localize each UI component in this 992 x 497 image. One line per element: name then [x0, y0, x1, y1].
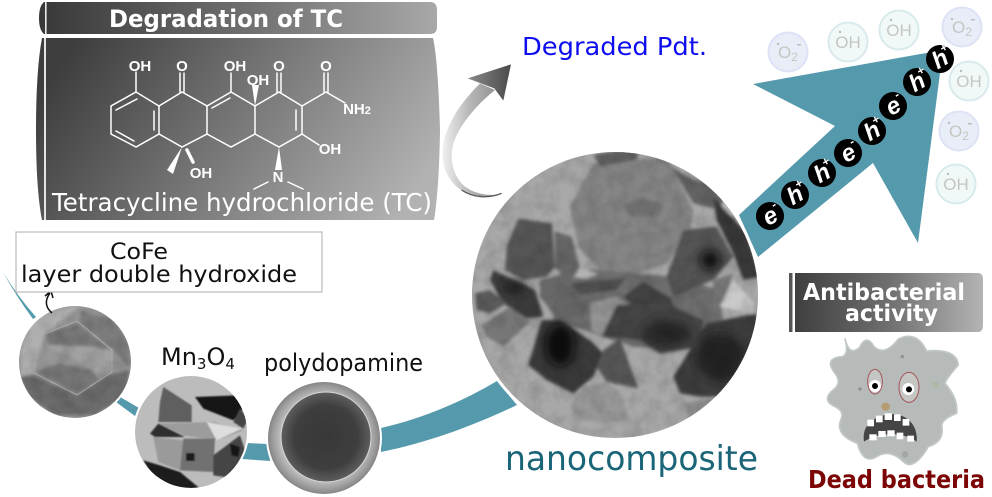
molecule atom labels: O — [273, 58, 285, 75]
label box: CoFe layer double hydroxide — [16, 232, 322, 292]
caption: tetracycline hydrochloride: Tetracycline hydrochloride (TC) — [51, 188, 432, 217]
circle: nanocomposite TEM image — [469, 147, 761, 441]
radical bubbles: O — [949, 122, 962, 141]
arrow: charge carriers — [739, 50, 943, 257]
charge carrier beads: + — [937, 40, 950, 55]
label: degraded product: Degraded Pdt. — [522, 32, 707, 61]
label: Mn3O4: 3 — [197, 355, 206, 373]
radical bubbles: OH — [956, 72, 982, 91]
header: antibacterial activity — [789, 273, 983, 332]
label: polydopamine: polydopamine — [264, 349, 423, 377]
label: Mn3O4: 4 — [225, 355, 235, 373]
charge carrier beads: + — [869, 112, 882, 127]
molecule atom labels: OH — [190, 165, 212, 182]
charge carrier beads: - — [847, 135, 857, 149]
label: nanocomposite: nanocomposite — [505, 439, 758, 479]
radical bubbles: OH — [835, 33, 861, 52]
charge carrier beads: h — [927, 44, 953, 75]
charge carrier beads: h — [782, 180, 808, 211]
radical bubbles: OH — [886, 21, 912, 40]
label box: CoFe layer double hydroxide: layer double hydroxide — [21, 262, 297, 288]
panel: degradation of TC — [36, 2, 440, 220]
curved arrow: to degraded product — [442, 64, 511, 197]
charge carrier beads: - — [892, 88, 902, 102]
radical bubbles: 2 — [791, 50, 798, 64]
circle: Mn3O4 TEM image — [133, 374, 249, 490]
molecule atom labels: N — [273, 169, 283, 186]
teal growth curve — [3, 272, 517, 461]
header: antibacterial activity: activity — [845, 301, 938, 327]
radical bubbles: OH — [943, 175, 969, 194]
header: antibacterial activity: Antibacterial — [803, 280, 965, 306]
circle: CoFe LDH TEM image — [17, 304, 133, 420]
radical bubbles: 2 — [965, 25, 972, 39]
charge carrier beads: - — [769, 198, 779, 212]
molecule atom labels — [129, 58, 371, 186]
circle: polydopamine TEM image — [266, 380, 382, 496]
header bar: degradation of TC — [39, 2, 437, 34]
molecule atom labels: O — [176, 58, 188, 75]
radical bubbles: O — [952, 18, 965, 37]
radical bubbles — [768, 8, 988, 204]
label: Mn3O4: O — [206, 343, 225, 371]
molecule atom labels: OH — [247, 72, 269, 89]
molecule: tetracycline structure — [111, 72, 345, 189]
wedge bonds — [167, 85, 282, 174]
molecule atom labels: O — [320, 58, 332, 75]
molecule atom labels: OH — [224, 58, 246, 75]
charge carrier beads: h — [904, 67, 930, 98]
charge carrier beads: + — [914, 63, 927, 78]
illustration: dead bacterium — [827, 336, 958, 465]
label box: CoFe layer double hydroxide: CoFe — [110, 240, 168, 265]
charge carrier beads: h — [859, 116, 885, 147]
molecule atom labels: OH — [129, 58, 151, 75]
radical bubbles: O — [778, 43, 791, 62]
radical bubbles: 2 — [962, 129, 969, 143]
header bar: degradation of TC: Degradation of TC — [109, 5, 343, 33]
molecule atom labels: OH — [319, 141, 341, 158]
charge carrier beads: h — [809, 158, 835, 189]
charge carrier beads — [750, 39, 959, 235]
charge carrier beads: + — [792, 176, 805, 191]
molecule atom labels: NH2 — [343, 101, 371, 118]
arrow: LDH callout pointer — [45, 291, 53, 313]
panel body — [36, 38, 440, 220]
label: Mn3O4: Mn — [161, 343, 197, 371]
charge carrier beads: e — [881, 91, 906, 121]
charge carrier beads: e — [836, 138, 861, 168]
charge carrier beads: + — [819, 154, 832, 169]
charge carrier beads: e — [758, 201, 783, 231]
